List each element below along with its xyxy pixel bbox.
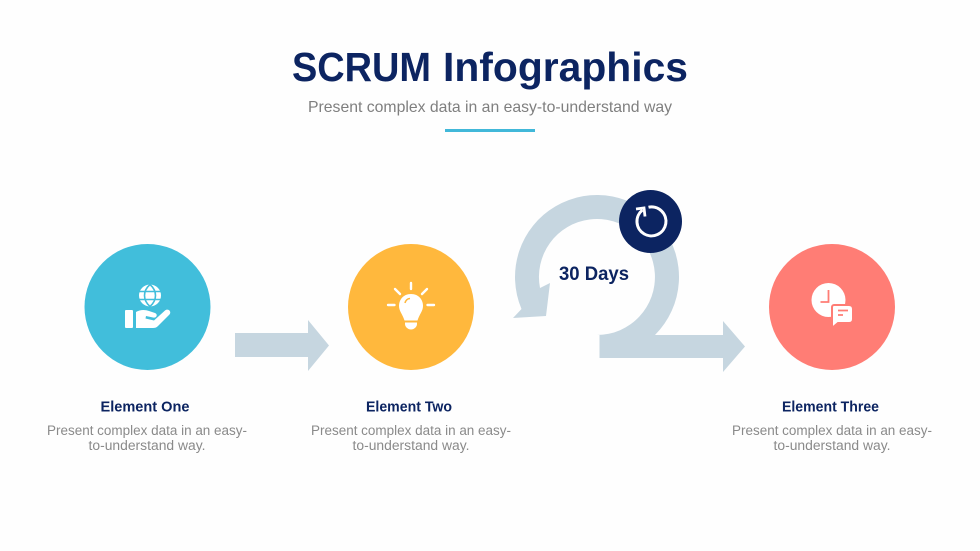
text: element one description: Present complex data in an easy- — [47, 423, 247, 438]
label: 30 days: 30 Days — [559, 264, 629, 285]
title underline — [445, 129, 535, 132]
scrum loop arrow — [513, 195, 745, 372]
title: SCRUM — [292, 44, 431, 90]
text: element two description — [311, 423, 511, 453]
circle: element two — [348, 244, 474, 370]
text: element three description: to-understand way. — [774, 438, 890, 453]
text: element one description: to-understand way. — [88, 438, 206, 453]
title — [292, 44, 688, 90]
text: element one description — [47, 423, 247, 453]
title: Infographics — [443, 44, 688, 90]
icon: globe in hand — [125, 284, 170, 328]
icon badge: refresh — [619, 190, 682, 253]
text: element two description: Present complex data in an easy- — [311, 423, 511, 438]
circle: element three — [769, 244, 895, 370]
subtitle: Present complex data in an easy-to-understand way — [308, 99, 672, 116]
arrow: one to two — [235, 320, 329, 371]
icon: clock and chat — [812, 283, 853, 328]
text: element three description: Present complex data in an easy- — [732, 423, 932, 438]
heading: element three: Element Three — [782, 398, 879, 416]
heading: element one: Element One — [100, 398, 190, 416]
icon: light bulb — [388, 283, 434, 330]
text: element two description: to-understand way. — [352, 438, 470, 453]
heading: element two: Element Two — [366, 398, 452, 416]
text: element three description — [732, 423, 932, 453]
circle: element one — [84, 244, 210, 370]
